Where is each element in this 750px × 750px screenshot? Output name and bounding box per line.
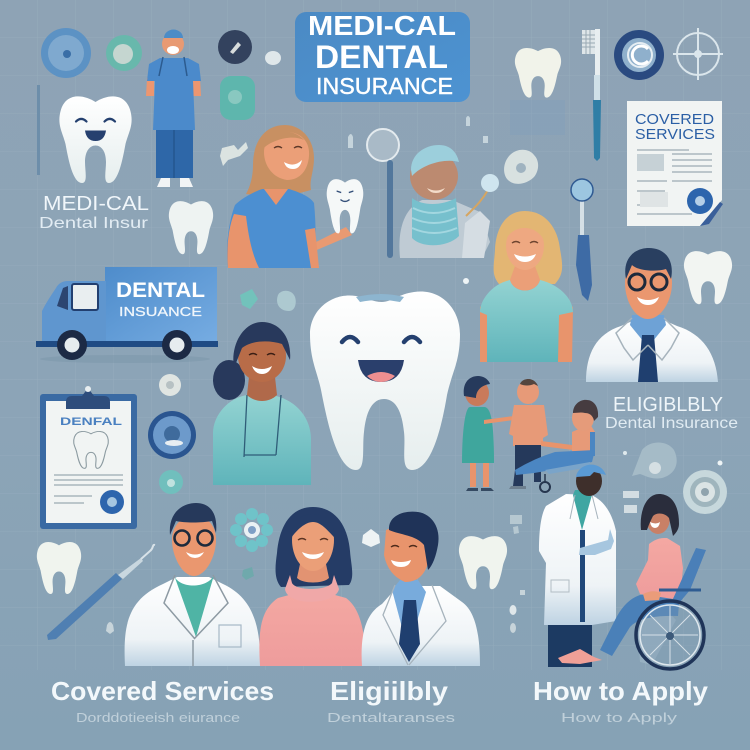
document: covered services: [627, 101, 723, 226]
tooth: bottom left tooth: [37, 542, 81, 594]
title banner: [295, 10, 470, 102]
tooth: smiling tooth top left: [59, 96, 132, 183]
icon: dental probe tool: [47, 545, 155, 640]
figure: dentist with glasses right: [586, 248, 718, 382]
caption: covered services: Dorddotieeish eiurance: [76, 710, 240, 725]
truck: dental insurance: DENTAL: [116, 279, 205, 302]
figure: nurse in teal: [213, 322, 311, 485]
icon: round mirror and handle: [571, 179, 593, 301]
icon: small blobs: [240, 278, 469, 311]
tooth: tooth held by woman: [327, 179, 363, 233]
figure: blonde woman in teal: [480, 211, 573, 362]
tooth: large central smiling tooth: [310, 292, 460, 470]
label: eligibility dental insurance: [605, 394, 738, 432]
icon: smoke blobs: [623, 442, 722, 513]
caption: how to apply: How to Apply: [533, 676, 709, 706]
icon: teal blob: [159, 470, 183, 494]
icon: crosshair: [673, 28, 723, 80]
icon: blue badge: [41, 28, 91, 78]
document: dental clipboard: DENFAL: [60, 416, 122, 428]
figure: family group with child and reclining patient: [462, 376, 598, 492]
label: Medi-Cal dental insurance: MEDI-CAL: [43, 193, 149, 215]
icon: blob: [504, 150, 538, 184]
title banner: MEDI-CAL: [308, 10, 456, 41]
truck: dental insurance: INSUANCE: [119, 304, 202, 319]
decorative tint panel under tooth: [510, 100, 565, 135]
caption: eligibility: [327, 676, 456, 725]
title banner: INSURANCE: [316, 73, 453, 99]
caption: eligibility: Dentaltaranses: [327, 710, 456, 725]
caption: how to apply: How to Apply: [561, 710, 678, 725]
icon: thin probe: [37, 85, 40, 175]
icon: flower: [230, 508, 273, 552]
icon: dark badge: [218, 30, 252, 64]
label: eligibility dental insurance: Dental Insurance: [605, 415, 738, 432]
document: covered services: COVERED: [635, 111, 714, 128]
truck: dental insurance: [36, 267, 218, 363]
figure: masked dentist with mirror: [399, 145, 499, 258]
tooth: small tooth: [169, 201, 213, 254]
document: covered services: SERVICES: [635, 126, 715, 143]
icon: toothbrush: [582, 29, 601, 161]
tooth: bottom centre tooth: [459, 536, 507, 589]
label: eligibility dental insurance: ELIGIBLBLY: [613, 394, 723, 416]
icon: teal capsule: [220, 76, 255, 120]
document: dental clipboard: [40, 386, 137, 529]
caption: covered services: [51, 676, 274, 725]
icon: flower blob: [159, 374, 181, 396]
caption: eligibility: Eligiilbly: [330, 676, 449, 706]
icon: small tooth blob: [265, 51, 281, 65]
title banner: DENTAL: [315, 39, 448, 75]
figure: dentist in scrubs: [146, 30, 201, 187]
figure: man with tie bottom right: [362, 512, 480, 666]
icon: copyright badge: [614, 30, 664, 80]
tooth: right side tooth: [684, 251, 732, 304]
figure: doctor with glasses bottom left: [125, 503, 260, 666]
label: Medi-Cal dental insurance: [39, 193, 149, 232]
icon: teal ring badge right: [683, 470, 727, 514]
icon: debris blob: [220, 142, 248, 166]
icon: small droplets and blobs: [106, 515, 525, 634]
figure: smiling woman with tooth: [227, 125, 352, 268]
label: Medi-Cal dental insurance: Dental Insur: [39, 215, 149, 232]
caption: how to apply: [533, 676, 709, 725]
tooth: top right tooth: [515, 48, 561, 98]
icon: blue circular badge: [148, 411, 196, 459]
figure: doctor glancing at patient in wheelchair: [539, 465, 706, 669]
icon: green badge: [106, 35, 142, 71]
figure: woman in pink sweater: [259, 507, 365, 666]
caption: covered services: Covered Services: [51, 676, 274, 706]
icon: mirror and droplets: [348, 116, 488, 258]
